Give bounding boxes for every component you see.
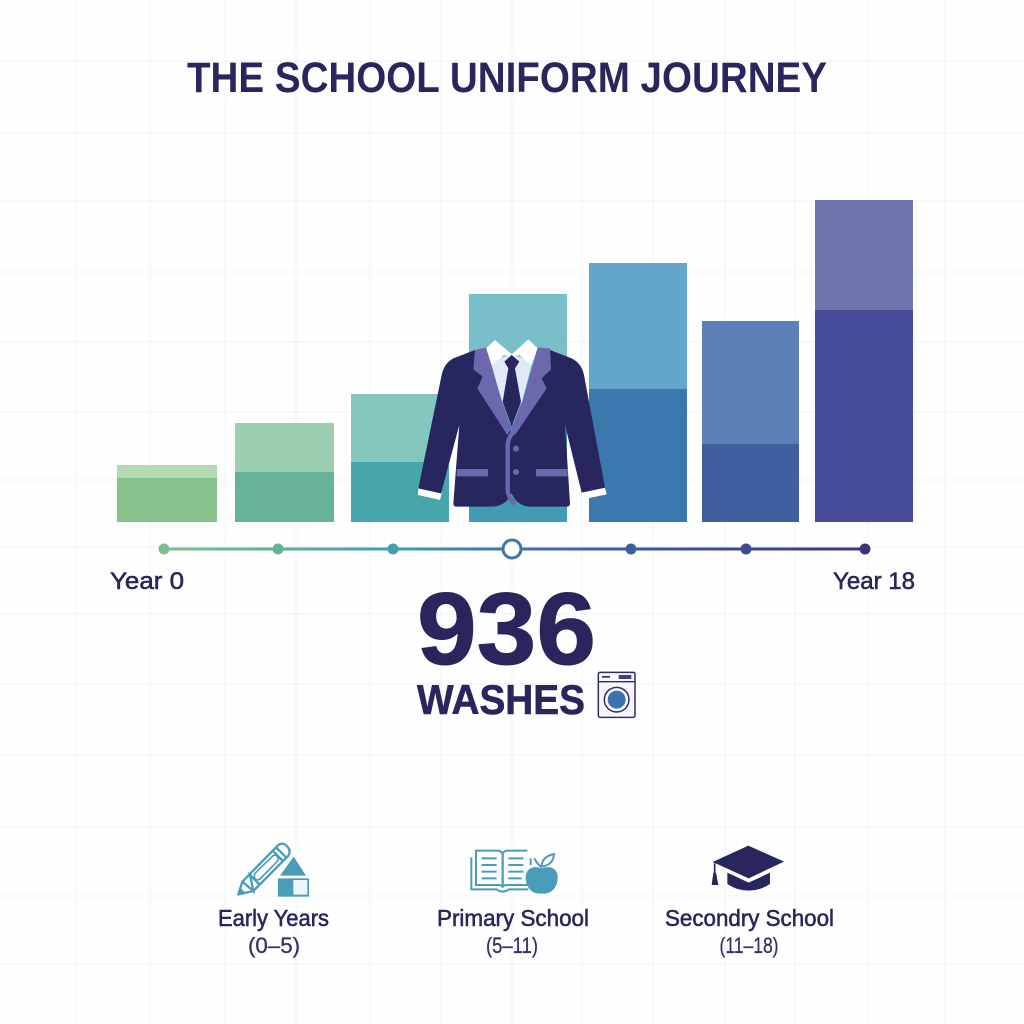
stage: early years — [218, 844, 329, 958]
bar 3 — [351, 394, 449, 522]
age range: (0–5) — [248, 933, 300, 958]
bar chart — [117, 200, 913, 522]
bar 4 — [469, 294, 567, 522]
label: year 18: Year 18 — [833, 568, 915, 595]
stage: primary school — [437, 851, 589, 958]
icon: washing machine — [598, 672, 635, 717]
bar 5 — [589, 263, 687, 522]
icon: book and apple — [471, 851, 558, 894]
bar 7 — [815, 200, 913, 522]
icon: pencil and blocks — [238, 844, 309, 897]
age range: (11–18) — [720, 933, 778, 958]
big number: 936 — [417, 572, 596, 686]
stage: secondary school — [665, 846, 834, 958]
label: Primary School — [437, 905, 589, 931]
label: year 0: Year 0 — [110, 568, 184, 595]
timeline — [158, 540, 870, 558]
age range: (5–11) — [486, 933, 538, 958]
icon: graduation cap — [712, 846, 784, 891]
label: Secondry School — [665, 905, 834, 931]
icon: school blazer — [418, 339, 607, 507]
bar 1 — [117, 465, 217, 522]
label: Early Years — [218, 905, 329, 931]
bar 6 — [702, 321, 799, 522]
washes label: WASHES — [417, 676, 585, 723]
bar 2 — [235, 423, 334, 522]
title: THE SCHOOL UNIFORM JOURNEY — [187, 54, 827, 102]
